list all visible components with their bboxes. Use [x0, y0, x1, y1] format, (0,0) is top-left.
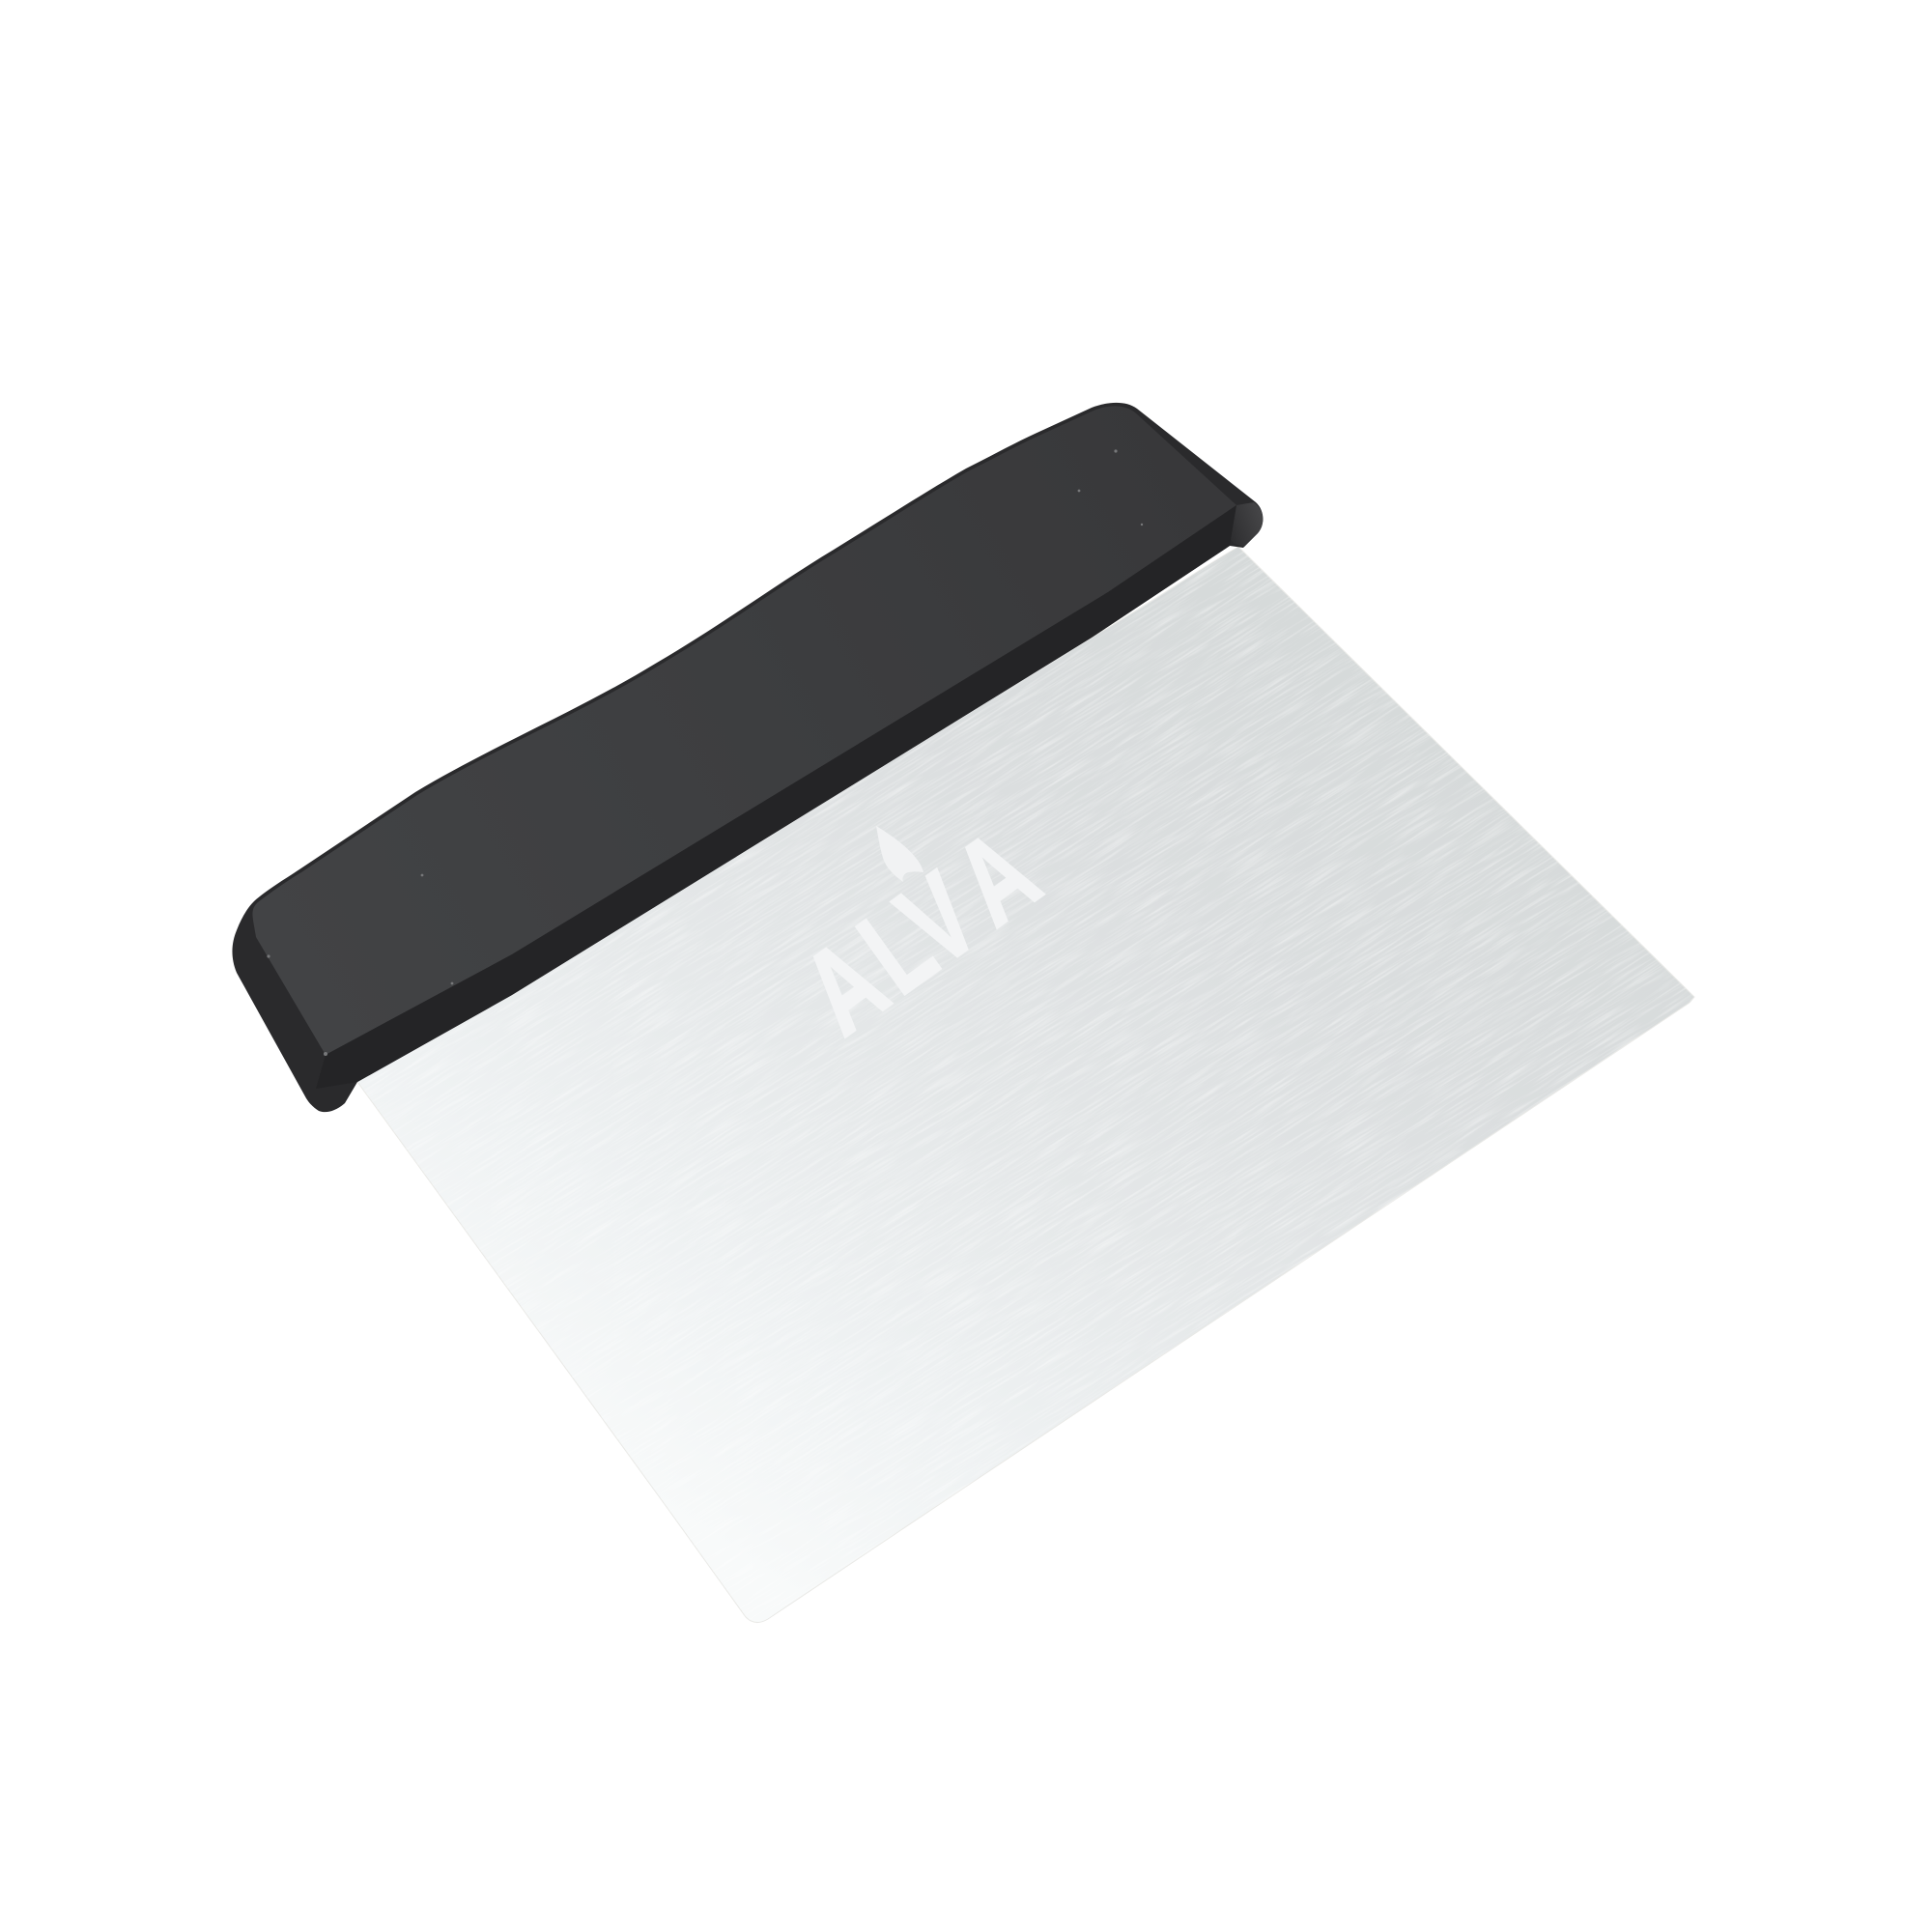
steel blade [357, 547, 1694, 1623]
handle specks [267, 449, 1143, 1056]
logo wordmark: ALVA [780, 805, 1062, 1060]
logo leaf [876, 826, 923, 882]
product photo: dough scraper [232, 402, 1694, 1623]
handle right end bevel [1215, 502, 1263, 547]
handle lower bevel shadow [316, 505, 1236, 1089]
handle top face [252, 406, 1236, 1055]
black handle [232, 403, 1263, 1112]
handle body and bevel [232, 403, 1263, 1112]
logo: ALVA with leaf [780, 805, 1062, 1060]
